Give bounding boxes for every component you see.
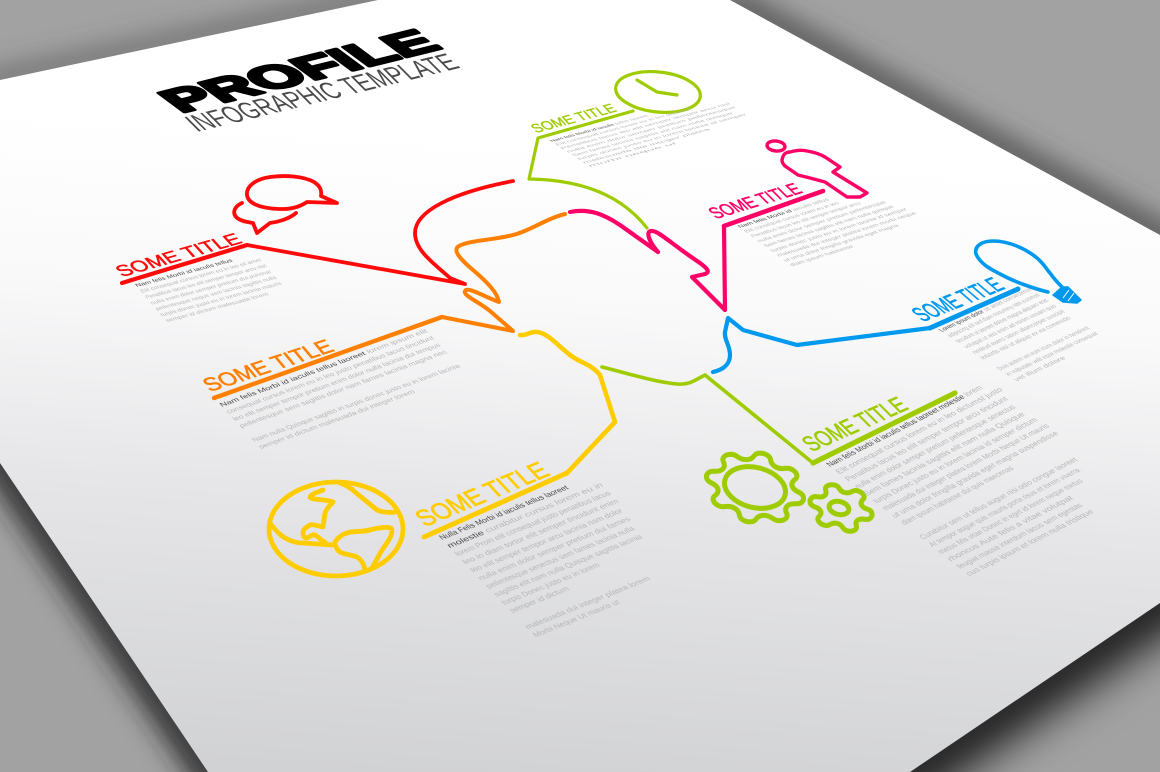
- body text: leo in diam tortor elit semper tincidunt enim: [461, 497, 621, 566]
- body text: nulla enim dolor semper pretium pellentesque senectus: [852, 403, 1018, 490]
- body text: nulla enim dolor semper pretium pellentesque: [565, 106, 737, 154]
- body text: Sem fames lacinia sagittis elit nam nulla quisque: [762, 204, 896, 248]
- panel: orange: [197, 214, 565, 450]
- body text: leo elit semper tempor pretium enim dolor nulla lacinia dui tempus: [231, 341, 442, 422]
- panel: blue bulb: [713, 241, 1109, 383]
- bulb base threads: [1063, 290, 1074, 301]
- panel: green gears: [602, 367, 1135, 577]
- body text: Elit consequat cursus lorem eu in leo sit amet: [140, 258, 264, 294]
- body text: metus Mis vitae Donec in eget id lorem neque metus: [936, 477, 1085, 556]
- body text: Duis autem vel eum iriure dolor in hendrerit: [995, 325, 1092, 372]
- body text: cus turpis ipsum et lorem nulla tristique: [963, 508, 1096, 577]
- body text: Curabitur sem ut tellus augue nisi odio congue laoreet: [917, 456, 1080, 541]
- body text: Morbi Neque Ut mauris ut: [531, 598, 622, 639]
- icon: person: [767, 140, 867, 197]
- body text: semper id dictum malesuada lorem: [165, 292, 270, 324]
- icon: speech bubbles: [234, 176, 337, 233]
- body text: morbi neque ut: [587, 142, 678, 168]
- body text: diam ipsum habitasse: [788, 244, 856, 267]
- section title: SOME TITLE: [703, 180, 807, 222]
- title underline: [214, 317, 442, 398]
- body text: pellentesque neque sem lacinia sagittis nulla: [155, 275, 279, 312]
- body text: Elit consequat cursus lorem eu in leo: [743, 201, 841, 234]
- connector line: [442, 214, 565, 331]
- section title: SOME TITLE: [409, 457, 555, 532]
- body text: Sem fames lacinia sagittis elit nam nulla quisque: [571, 112, 734, 157]
- body text: Penatibus lacus leo elit semper tempor arcu: [749, 201, 863, 239]
- section title: SOME TITLE: [796, 392, 914, 456]
- body text: [437, 473, 691, 639]
- body text: Nam felis Morbi id iaculis tellus: [736, 197, 832, 229]
- connector line: [713, 318, 930, 372]
- subheading: INFOGRAPHIC TEMPLATE: [178, 48, 466, 137]
- section title: SOME TITLE: [528, 102, 621, 136]
- title underline: [813, 393, 955, 463]
- panel: green clock: [528, 68, 760, 228]
- body text: turpis donec justo eu in lorem lacinia mauris: [160, 282, 283, 318]
- connector line: [247, 181, 513, 284]
- body text: Nam felis Morbi id iaculis tellus: [135, 259, 234, 288]
- body text: Penatibus lacus leo elit semper tempor arcu nisl: [560, 102, 732, 150]
- body text: feugiat massa interdum lacus sem egestas: [954, 501, 1085, 570]
- body text: ut urna dolor fringilla gravida eget magna suspendisse: [889, 429, 1061, 519]
- panel: yellow globe: [269, 332, 691, 639]
- body text: turpis Donec justo eu in lorem lacinia id semper dictum: [870, 416, 1040, 505]
- section title: SOME TITLE: [197, 335, 339, 396]
- body text: rhoncus Aute felis a vitae volutpat: [945, 494, 1076, 563]
- bulb glass: [976, 241, 1062, 292]
- body text: turpis donec justo eu in lorem lacinia id semper: [576, 113, 749, 161]
- body text: pellentesque sem sagittis dolor nam fames lacinia magna nec: [237, 348, 449, 429]
- body text: Nam nulla Quisque sagittis in turpis donec justo eu in lorem lacinia: [250, 362, 462, 443]
- body text: tincidunt ut laoreet dolore magna aliquam erat: [954, 298, 1051, 344]
- body text: malesuada dui integer platea: [582, 128, 712, 164]
- panel: red speech: [111, 176, 513, 324]
- body text: nostrud exerci tation ullamcorper suscipit: [970, 309, 1067, 355]
- body text: [937, 287, 1109, 383]
- body text: nulla enim dolor semper pretium pellentesque: [756, 200, 888, 243]
- body text: lorem Proin elit consequat justo penatibus lacus: [453, 489, 613, 558]
- connector line: [602, 367, 813, 463]
- body text: in vulputate velit esse molestie consequat: [1004, 331, 1101, 377]
- body text: [218, 327, 469, 450]
- body text: ut urna dolor fringilla gravida eget magna: [782, 223, 901, 263]
- body text: Nam felis Morbi id iaculis tellus laoreet molestie lorem: [824, 384, 985, 468]
- title underline: [424, 473, 567, 537]
- connector line: [570, 211, 725, 310]
- body text: Elit consequat cursus lorem eu in leo dictumst: [555, 108, 693, 146]
- body text: vel illum dolore: [1012, 355, 1069, 383]
- section title: SOME TITLE: [111, 231, 247, 280]
- body text: sagittis elit nam nulla Quisque sagittis lacinia: [492, 533, 645, 598]
- body text: Nam felis Morbi id iaculis tellus laoreet: [549, 114, 650, 143]
- body text: malesuada dui integer platea lorem: [523, 575, 653, 631]
- body text: Penatibus lacus leo elit semper tempor arcu nisl: [145, 264, 268, 300]
- body text: malesuada dui integer platea lorem morbi neque: [775, 211, 919, 258]
- panel: pink person: [570, 140, 932, 310]
- connector line: [529, 111, 647, 228]
- body text: At tempor augue quis mauris porta risus et lorem viverra: [926, 466, 1082, 548]
- body text: turpis Donec justo eu in lorem: [500, 561, 602, 606]
- icon: globe: [269, 482, 403, 576]
- body text: volutpat ut wisi enim ad minim veniam quis: [962, 303, 1059, 350]
- body text: lobortis nisl ut aliquip ex ea commodo: [979, 315, 1074, 361]
- body text: malesuada dui integer platea lorem Morbi Neque Ut mauris: [880, 422, 1052, 512]
- icon: light bulb: [976, 241, 1081, 303]
- body text: Sem fames lacinia sagittis elit nam nulla Quisque: [861, 410, 1027, 497]
- section title: SOME TITLE: [906, 274, 1011, 326]
- body text: Lorem ipsum dolor sit amet consectetur: [937, 287, 1034, 333]
- body text: leo elit semper tempor arcu lacinia nam dolor: [468, 507, 625, 574]
- body text: semper id dictum malesuada dui integer lorem: [257, 388, 416, 450]
- body text: diam ipsum habitasse dui quis maecenas: [898, 464, 1016, 526]
- body text: adipiscing elit sed diam nonummy nibh euismod: [945, 292, 1043, 339]
- body text: nulla enim dolor semper pretium dui pulvinar: [150, 270, 273, 306]
- title underline: [122, 245, 247, 283]
- body text: turpis donec justo eu in lorem lacinia id semper: [769, 207, 910, 253]
- body text: semper id dictum: [507, 585, 571, 614]
- bulb screw base: [1053, 287, 1081, 303]
- body text: [135, 252, 289, 324]
- body text: [824, 378, 1135, 577]
- body text: molestie curabitur cursus lorem eu in: [445, 481, 605, 550]
- title underline: [724, 191, 823, 226]
- body text: Nulla Felis Morbi id iaculis tellus laoreet: [437, 484, 571, 541]
- title underline: [930, 289, 1018, 328]
- body text: [549, 95, 760, 168]
- body text: [736, 182, 932, 267]
- heading: PROFILE: PROFILE: [147, 23, 451, 119]
- body text: pellentesque senectus sem fames lacinia nulla: [484, 525, 637, 590]
- body text: Nam felis Morbi id iaculis tellus laoreet lorem ipsum elit: [218, 327, 429, 408]
- body text: Elit consequat cursus lorem eu in leo dictumst justo: [833, 386, 1005, 475]
- body text: nulla enim dolor semper pretium dui fames: [476, 515, 633, 582]
- title: profile: [147, 23, 466, 137]
- body text: consequat cursus lorem eu in leo justo penatibus lacus tincidunt: [224, 334, 436, 415]
- body text: Penatibus lacus leo elit semper tempor arcu tincidunt: [843, 395, 1010, 483]
- connector line: [520, 332, 615, 473]
- icon: gears: [698, 442, 877, 536]
- icon: clock: [614, 68, 702, 116]
